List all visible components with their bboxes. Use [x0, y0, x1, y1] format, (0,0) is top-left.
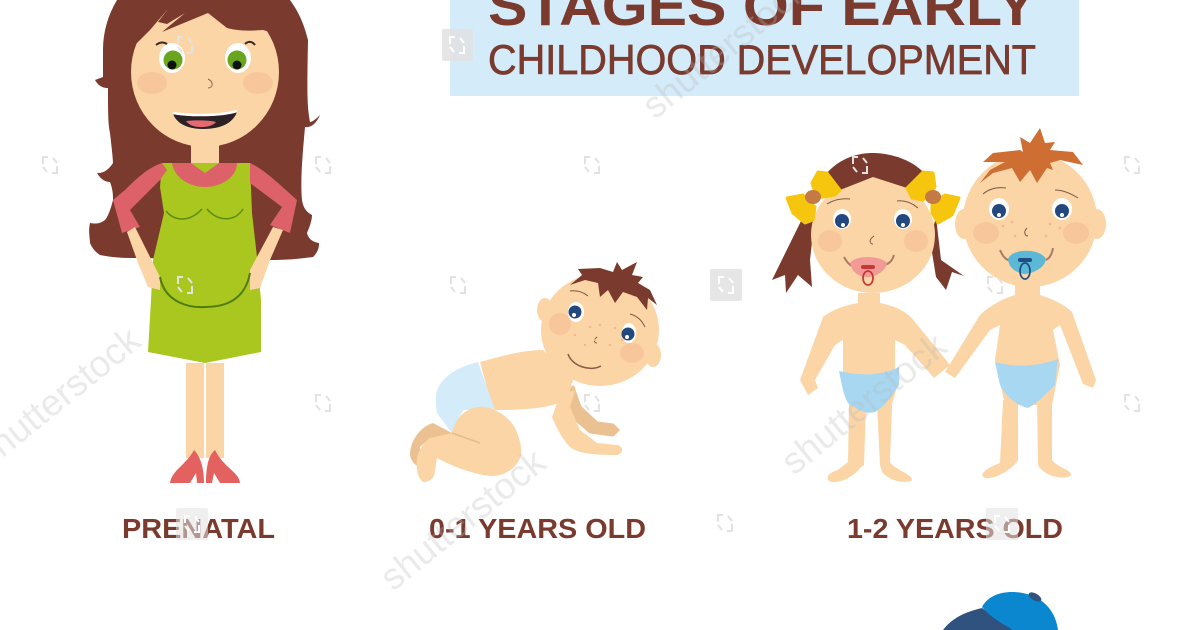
label: 1-2 years old: 1-2 YEARS OLD: [847, 513, 1063, 544]
label: 0-1 years old: 0-1 YEARS OLD: [429, 513, 646, 544]
figure: cap at bottom edge: [943, 590, 1058, 630]
figure: toddler girl: [772, 153, 964, 482]
watermarks: shutterstock: [372, 441, 553, 598]
title banner: [450, 0, 1079, 96]
figure: pregnant mother: [89, 0, 320, 483]
figure: toddler boy: [945, 128, 1106, 478]
figure: crawling baby: [410, 262, 661, 482]
title banner: CHILDHOOD DEVELOPMENT: [488, 36, 1036, 83]
watermarks: shutterstock: [773, 325, 954, 482]
label: prenatal: PRENATAL: [122, 513, 275, 544]
